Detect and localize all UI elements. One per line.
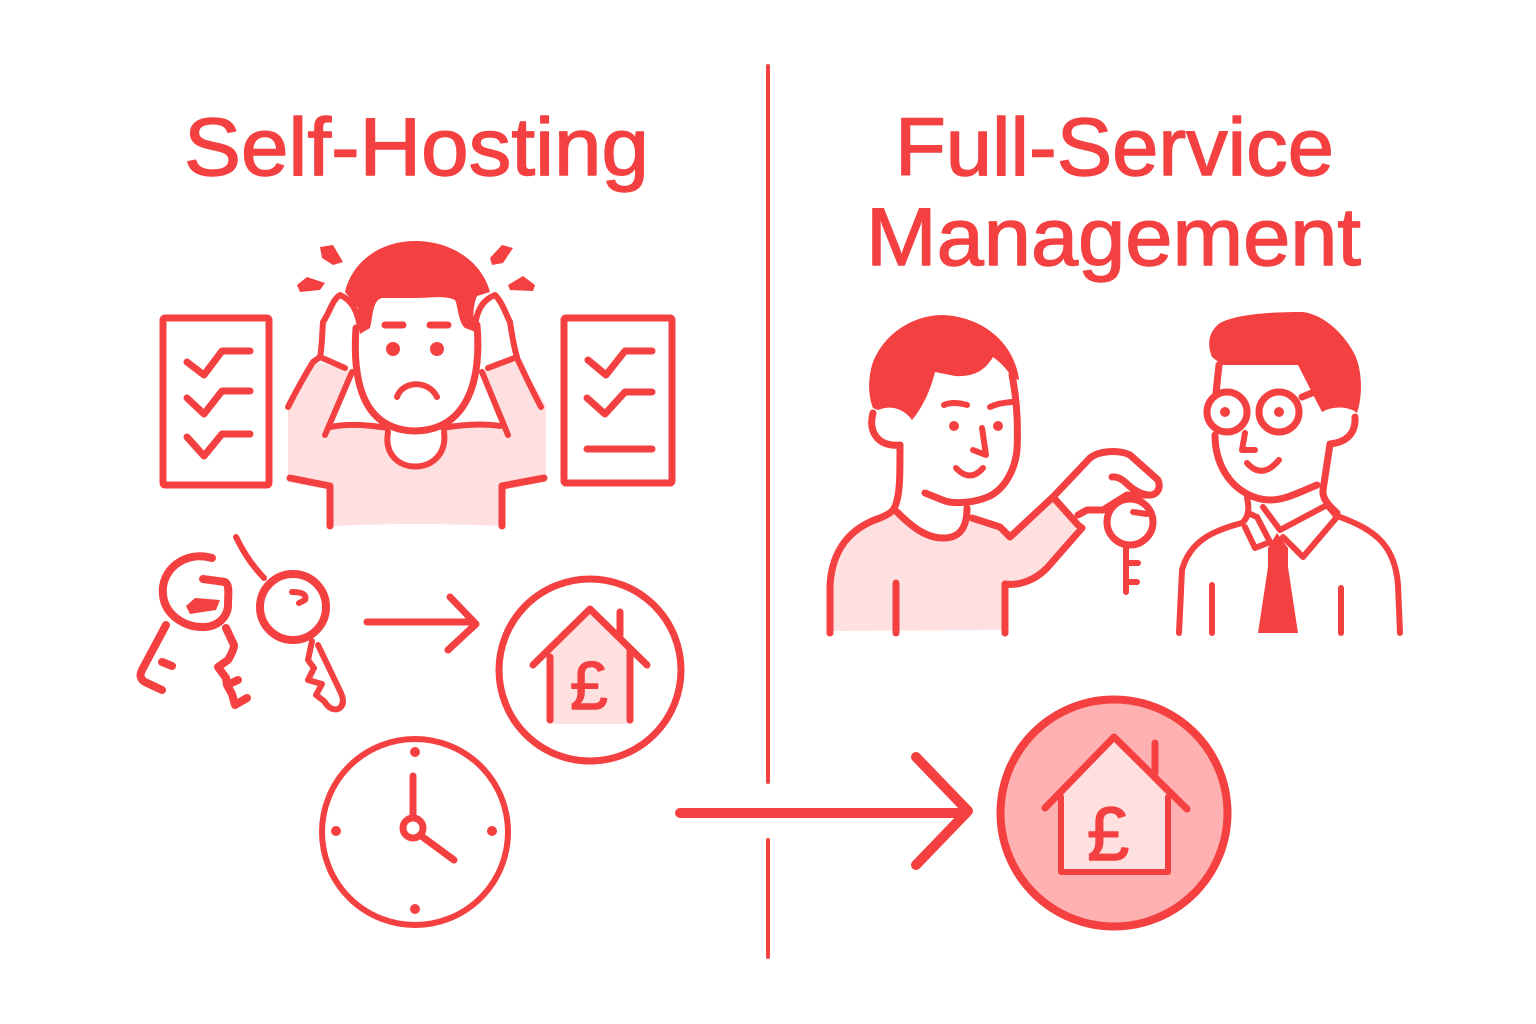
face: [1215, 365, 1355, 513]
hair: [345, 241, 490, 334]
facial features: [385, 322, 448, 328]
facial features: [944, 402, 1012, 476]
right key: [236, 537, 343, 709]
heading: Full-Service Management: [866, 102, 1361, 283]
icon: right checklist: [564, 318, 672, 483]
hair: [1209, 312, 1361, 413]
sweater outline: [896, 497, 1082, 633]
icon: clock: [322, 739, 508, 925]
centre divider: [766, 66, 770, 957]
owner handing over key: [830, 315, 1159, 633]
icon: filled house circle: £: [1087, 792, 1129, 877]
left key: [141, 556, 247, 705]
face: [925, 375, 1017, 503]
collar: [387, 432, 444, 466]
icon: handed key: [1107, 499, 1153, 592]
icon: house with pound sign: [499, 579, 681, 761]
shirt: [288, 358, 546, 526]
heading: Full-Service Management: Full-Service: [895, 102, 1334, 193]
ear and neck: [830, 413, 900, 633]
sleeves: [290, 478, 544, 526]
hair: [869, 315, 1019, 420]
icon: filled house circle: [1000, 700, 1228, 926]
icon: house with pound sign: £: [570, 648, 608, 724]
stress marks: [297, 245, 535, 292]
stressed person: [288, 241, 546, 526]
face: [355, 325, 478, 431]
hand: [1053, 452, 1159, 515]
tie: [1258, 533, 1298, 633]
heading: Self-Hosting: Self-Hosting: [184, 102, 649, 193]
nose and smile: [1242, 433, 1279, 471]
arms and hands: [288, 295, 541, 435]
suit and collar: [1179, 498, 1400, 633]
arrow: to full-service: [680, 757, 968, 865]
icon: left checklist: [163, 318, 269, 485]
arrow: keys to house: [367, 597, 476, 650]
sweater: [833, 497, 1078, 631]
heading: Full-Service Management: Management: [866, 192, 1361, 283]
glasses: [1207, 392, 1312, 432]
icon: pair of keys: [141, 537, 343, 709]
property manager with glasses: [1179, 312, 1400, 633]
